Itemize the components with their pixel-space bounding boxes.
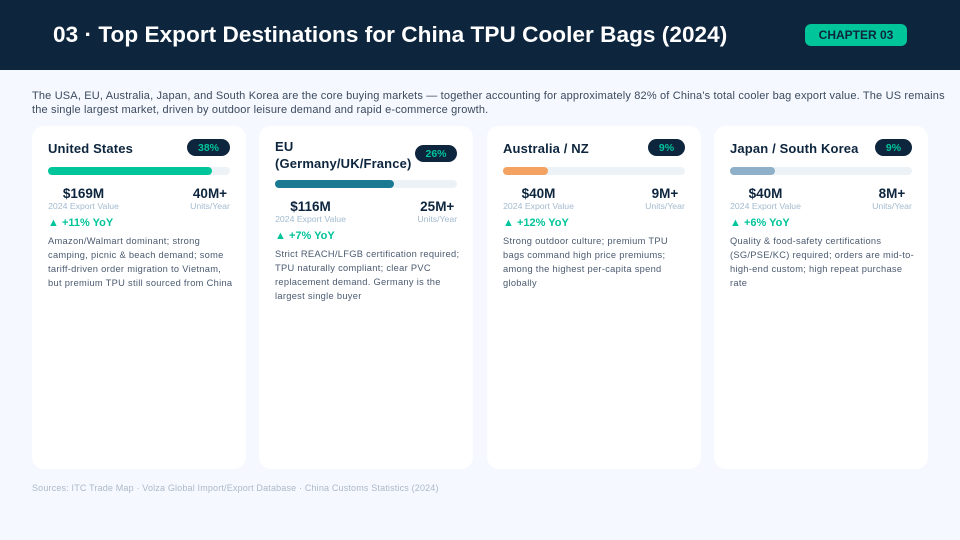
stat: units: Units/Year bbox=[417, 214, 457, 224]
intro text: the single largest market, driven by outdoor leisure demand and rapid e-commerce growth. bbox=[32, 104, 488, 116]
panel: United States bbox=[32, 126, 246, 469]
description bbox=[503, 236, 668, 288]
panel: Japan / South Korea bbox=[714, 126, 928, 469]
description: (SG/PSE/KC) required; orders are mid-to- bbox=[730, 250, 914, 260]
stat: export value: 2024 Export Value bbox=[503, 201, 574, 211]
share bar bbox=[503, 167, 685, 175]
description bbox=[48, 236, 232, 288]
stat: units: Units/Year bbox=[190, 201, 230, 211]
intro text bbox=[32, 90, 945, 116]
card heading bbox=[275, 139, 412, 170]
stat: units: 8M+ bbox=[879, 186, 905, 201]
stat: export value: $116M bbox=[290, 199, 331, 214]
stat: export value: 2024 Export Value bbox=[275, 214, 346, 224]
share bar bbox=[48, 167, 230, 175]
description: Strict REACH/LFGB certification required; bbox=[275, 249, 459, 259]
description bbox=[275, 249, 459, 301]
stat: units: Units/Year bbox=[645, 201, 685, 211]
share pill: 26% bbox=[425, 148, 446, 160]
description: bags command high price premiums; bbox=[503, 250, 665, 260]
share pill: 38% bbox=[198, 142, 219, 154]
share pill bbox=[187, 139, 230, 156]
growth: ▲ +11% YoY bbox=[48, 217, 113, 229]
stat: units: 40M+ bbox=[193, 186, 227, 201]
description: largest single buyer bbox=[275, 291, 362, 301]
description: tariff-driven order migration to Vietnam, bbox=[48, 264, 221, 274]
description: Amazon/Walmart dominant; strong bbox=[48, 236, 200, 246]
stat: units: 25M+ bbox=[420, 199, 454, 214]
sources note: Sources: ITC Trade Map · Volza Global Import/Export Database · China Customs Statistics (2024) bbox=[32, 483, 439, 493]
description: but premium TPU still sourced from China bbox=[48, 278, 232, 288]
header band bbox=[0, 0, 960, 70]
description bbox=[730, 236, 914, 288]
stat: export value: $169M bbox=[63, 186, 104, 201]
share pill: 9% bbox=[886, 142, 901, 154]
card heading: Australia / NZ bbox=[503, 141, 589, 156]
description: rate bbox=[730, 278, 747, 288]
chapter badge bbox=[805, 24, 907, 46]
share pill bbox=[648, 139, 685, 156]
chapter badge: CHAPTER 03 bbox=[819, 28, 893, 42]
description: camping, picnic & beach demand; some bbox=[48, 250, 224, 260]
growth: ▲ +7% YoY bbox=[275, 230, 335, 242]
stat: units bbox=[872, 186, 912, 211]
share bar bbox=[730, 167, 912, 175]
description: replacement demand. Germany is the bbox=[275, 277, 441, 287]
growth: ▲ +6% YoY bbox=[730, 217, 790, 229]
card heading: EU bbox=[275, 139, 293, 154]
stat: units: 9M+ bbox=[652, 186, 678, 201]
stat: units bbox=[417, 199, 457, 224]
stat: export value: 2024 Export Value bbox=[730, 201, 801, 211]
stat: export value: $40M bbox=[749, 186, 782, 201]
card heading: United States bbox=[48, 141, 133, 156]
share pill bbox=[875, 139, 912, 156]
title: 03 · Top Export Destinations for China TPU Cooler Bags (2024) bbox=[53, 22, 727, 47]
stat: export value bbox=[275, 199, 346, 224]
stat: export value: $40M bbox=[522, 186, 555, 201]
card heading: Japan / South Korea bbox=[730, 141, 859, 156]
description: high-end custom; high repeat purchase bbox=[730, 264, 902, 274]
stat: units: Units/Year bbox=[872, 201, 912, 211]
stat: units bbox=[190, 186, 230, 211]
growth: ▲ +12% YoY bbox=[503, 217, 569, 229]
stat: export value bbox=[48, 186, 119, 211]
panel: EU bbox=[259, 126, 473, 469]
description: Quality & food-safety certifications bbox=[730, 236, 881, 246]
share bar bbox=[275, 180, 457, 188]
description: TPU naturally compliant; clear PVC bbox=[275, 263, 431, 273]
stat: export value bbox=[730, 186, 801, 211]
stat: export value: 2024 Export Value bbox=[48, 201, 119, 211]
description: globally bbox=[503, 278, 537, 288]
share pill bbox=[415, 145, 457, 162]
panel: Australia / NZ bbox=[486, 126, 700, 469]
description: among the highest per-capita spend bbox=[503, 264, 662, 274]
description: Strong outdoor culture; premium TPU bbox=[503, 236, 668, 246]
stat: units bbox=[645, 186, 685, 211]
stat: export value bbox=[503, 186, 574, 211]
card heading: (Germany/UK/France) bbox=[275, 156, 412, 170]
share pill: 9% bbox=[659, 142, 674, 154]
intro text: The USA, EU, Australia, Japan, and South Korea are the core buying markets — together accounting for approximately 82% of China's total cooler bag export value. The US remains bbox=[32, 90, 945, 102]
